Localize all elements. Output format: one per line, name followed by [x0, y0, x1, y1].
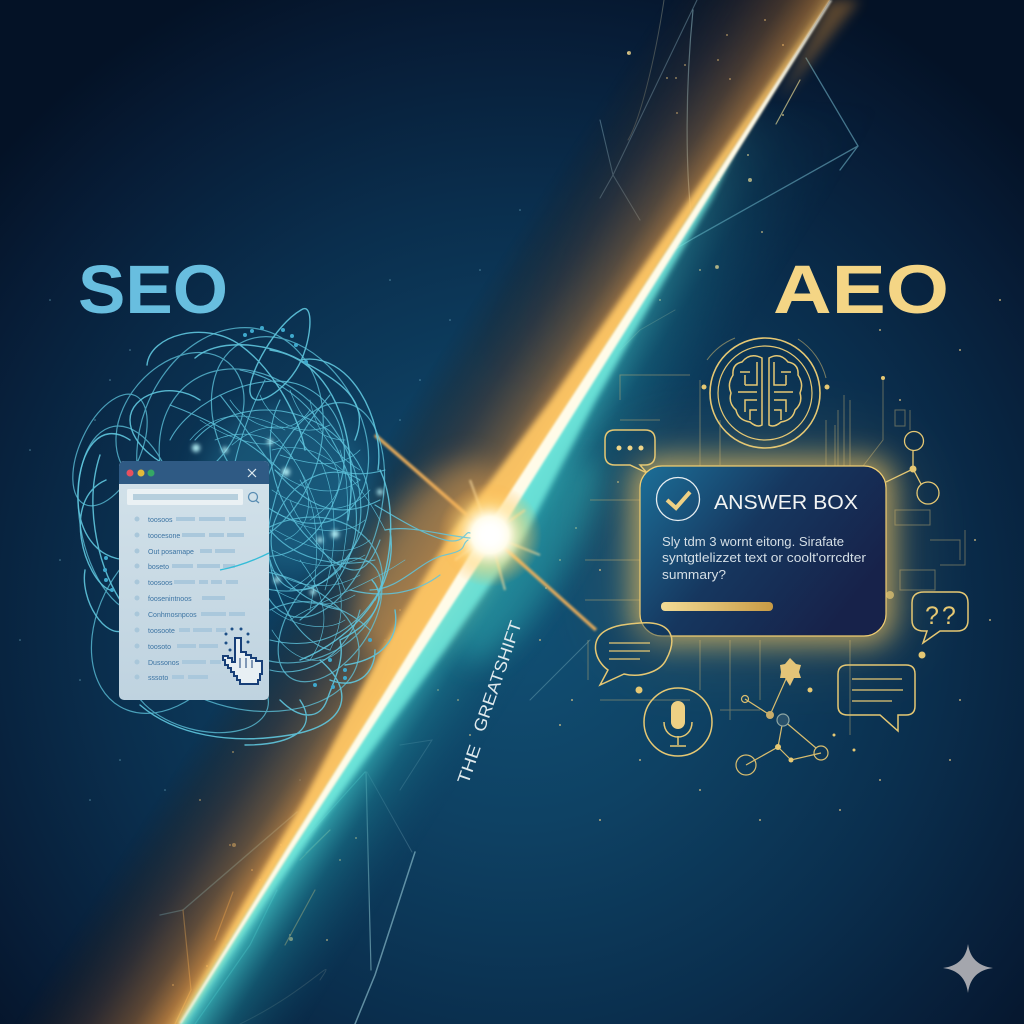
text speech bubble oval [595, 623, 672, 685]
beam top orange bloom [780, 0, 860, 100]
text speech bubble rectangle [838, 665, 915, 731]
pointer cursor icon [223, 628, 262, 684]
top right node network [886, 432, 939, 504]
AEO circuit background [585, 375, 965, 735]
teal strand over window [220, 553, 269, 570]
results list: Out posamape [148, 549, 194, 556]
results list: toocesone [148, 533, 180, 540]
results list: toosoto [148, 644, 171, 651]
answer box text: Sly tdm 3 wornt eitong. Sirafate [662, 534, 844, 549]
brain lobes [729, 356, 802, 426]
gold accent dots [636, 376, 926, 752]
web outer loops [78, 309, 396, 745]
microphone icon [644, 688, 712, 756]
results list: boseto [148, 564, 169, 571]
central burst [375, 435, 620, 630]
window title bar [119, 461, 269, 484]
rotated label: the great shift: THE [454, 742, 485, 786]
dotted orbit beads [103, 326, 372, 689]
web dense strands [190, 390, 405, 660]
results list: toosoos [148, 517, 173, 524]
answer box text [662, 534, 867, 582]
beam gold band [177, 0, 829, 1024]
beam teal side glow [180, 120, 774, 1024]
question speech bubble [912, 592, 968, 643]
rotated label: the great shift: GREATSHIFT [470, 618, 526, 734]
results list: toosoote [148, 628, 175, 635]
progress bar [661, 602, 773, 611]
lower node network [736, 658, 828, 775]
results list: foosenintnoos [148, 596, 192, 603]
wires toward burst [350, 505, 470, 594]
brain icon [702, 338, 830, 448]
rotated label: the great shift [454, 618, 526, 786]
results list: Dussonos [148, 660, 180, 667]
beam gold haze by the burst [325, 438, 535, 682]
title: AEO: AEO [773, 251, 949, 328]
web haze [200, 405, 370, 575]
tangled web of blue lines [57, 301, 470, 747]
beam white core [179, 0, 832, 1024]
answer box panel [640, 466, 886, 636]
background network lines [160, 0, 858, 1024]
results list: sssoto [148, 675, 168, 682]
wider gold halo [610, 440, 910, 660]
check icon [656, 478, 700, 520]
answer box text: syntgtlelizzet text or coolt'orrcdter [662, 550, 867, 565]
close icon [248, 469, 256, 477]
search field [127, 489, 243, 505]
results list: toosoos [148, 580, 173, 587]
results list [134, 516, 246, 682]
glowing web nodes [192, 439, 383, 595]
watermark sparkle icon [943, 944, 993, 993]
brain outer rings [702, 338, 830, 448]
answer box [640, 466, 886, 636]
answer box glow [632, 458, 894, 644]
dots speech bubble [605, 430, 655, 473]
question speech bubble: ?? [925, 602, 959, 630]
title: SEO: SEO [78, 251, 228, 328]
beam teal haze by the burst [437, 440, 623, 680]
window body [119, 461, 269, 700]
search icon [248, 492, 259, 503]
answer box text: summary? [662, 567, 726, 582]
answer box heading: ANSWER BOX [714, 492, 858, 514]
web elliptical loops [57, 301, 407, 747]
window control dots [126, 470, 154, 476]
browser search results window [119, 461, 269, 700]
results list: Conhmosnpcos [148, 612, 197, 619]
beam teal band [179, 150, 735, 1024]
